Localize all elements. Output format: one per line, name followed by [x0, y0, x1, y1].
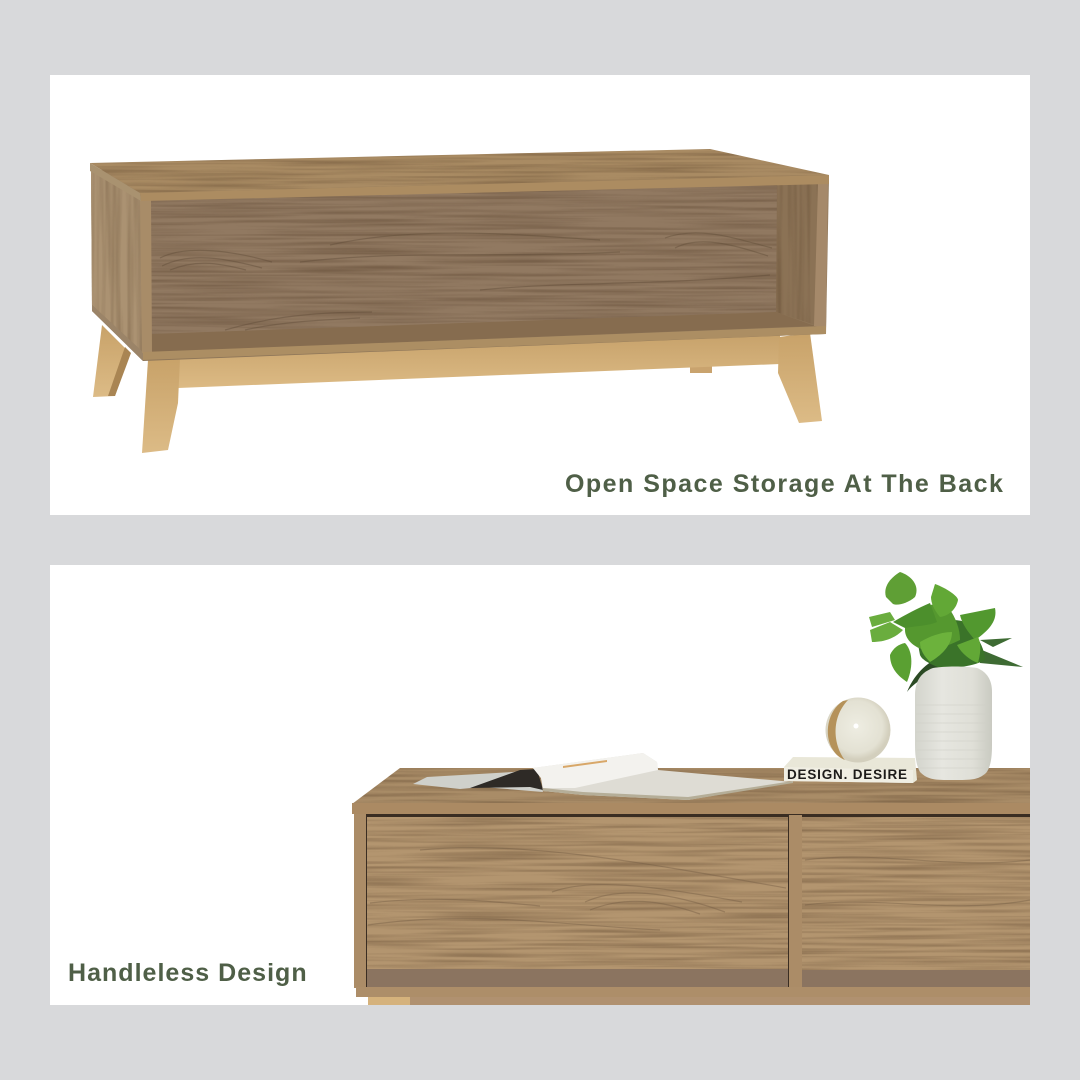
right drawer — [802, 817, 1030, 970]
right drawer recess strip — [802, 970, 1030, 987]
front bottom band — [143, 326, 826, 360]
inner right side — [776, 184, 819, 325]
top left edge — [90, 163, 141, 201]
body underlay — [91, 170, 829, 361]
right body backing — [366, 814, 1030, 988]
panel: handleless design — [50, 565, 1030, 1005]
top surface — [90, 149, 829, 193]
top front edge — [140, 175, 829, 201]
caption: open space storage: Open Space Storage At The Back — [565, 470, 1004, 498]
middle stile — [789, 815, 802, 988]
drawer grain knots — [368, 848, 1030, 930]
bottom rail — [356, 987, 1030, 997]
front right leg — [778, 333, 822, 423]
book: DESIGN. DESIRE — [787, 767, 907, 782]
left side panel — [91, 171, 142, 352]
coffee table photo — [90, 149, 829, 453]
lower rail shadow — [410, 997, 1030, 1005]
front left leg — [142, 358, 180, 453]
plant — [869, 572, 1023, 692]
shelf — [151, 312, 815, 352]
side bottom edge — [92, 305, 143, 361]
glass globe — [826, 698, 890, 762]
left stile — [354, 814, 367, 988]
book — [784, 757, 917, 783]
magazine — [413, 753, 793, 800]
sideboard photo — [352, 572, 1030, 1005]
vase — [915, 666, 992, 780]
back wall — [151, 185, 777, 334]
top surface — [352, 768, 1030, 804]
foot — [368, 997, 410, 1005]
top front edge — [352, 803, 1030, 814]
left drawer recess strip — [367, 969, 788, 987]
left drawer — [367, 817, 788, 969]
left front stile — [140, 200, 152, 353]
back left leg — [93, 325, 131, 397]
wall grain knots — [160, 233, 772, 330]
under rail — [178, 332, 780, 388]
panel: open space storage — [50, 75, 1030, 515]
right front stile — [814, 184, 828, 328]
caption: handleless design: Handleless Design — [68, 959, 308, 987]
far foot — [690, 366, 712, 373]
